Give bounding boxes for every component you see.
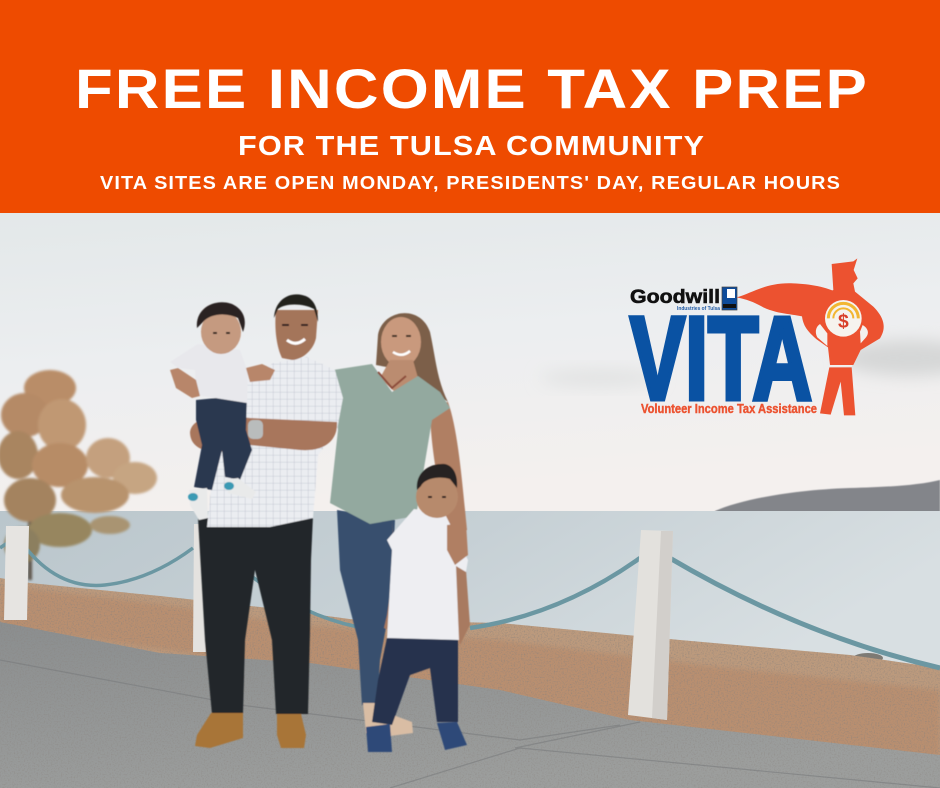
photo background: seaside scene (0, 213, 940, 788)
icon: superhero with cape (737, 258, 884, 415)
woman's hand (447, 523, 468, 565)
logo wordmark: VITA: VITA (630, 293, 812, 425)
fence posts and ropes (0, 524, 940, 720)
icon: Goodwill g box (722, 287, 737, 310)
woman (330, 313, 467, 736)
logo subtext: Industries of Tulsa (677, 306, 720, 312)
tree (0, 370, 157, 580)
logo tagline: Volunteer Income Tax Assistance (641, 401, 817, 416)
header banner (0, 0, 940, 213)
subtitle: FOR THE TULSA COMMUNITY (238, 130, 705, 161)
man (190, 294, 343, 748)
icon: superhero with cape: $ (838, 311, 849, 332)
boy (366, 464, 470, 752)
Goodwill VITA logo (630, 258, 884, 425)
logo wordmark: Goodwill: Goodwill (630, 286, 720, 308)
family photo (170, 294, 470, 752)
hours notice: VITA SITES ARE OPEN MONDAY, PRESIDENTS' DAY, REGULAR HOURS (100, 173, 841, 193)
title: FREE INCOME TAX PREP (75, 57, 869, 120)
baby (170, 302, 275, 520)
